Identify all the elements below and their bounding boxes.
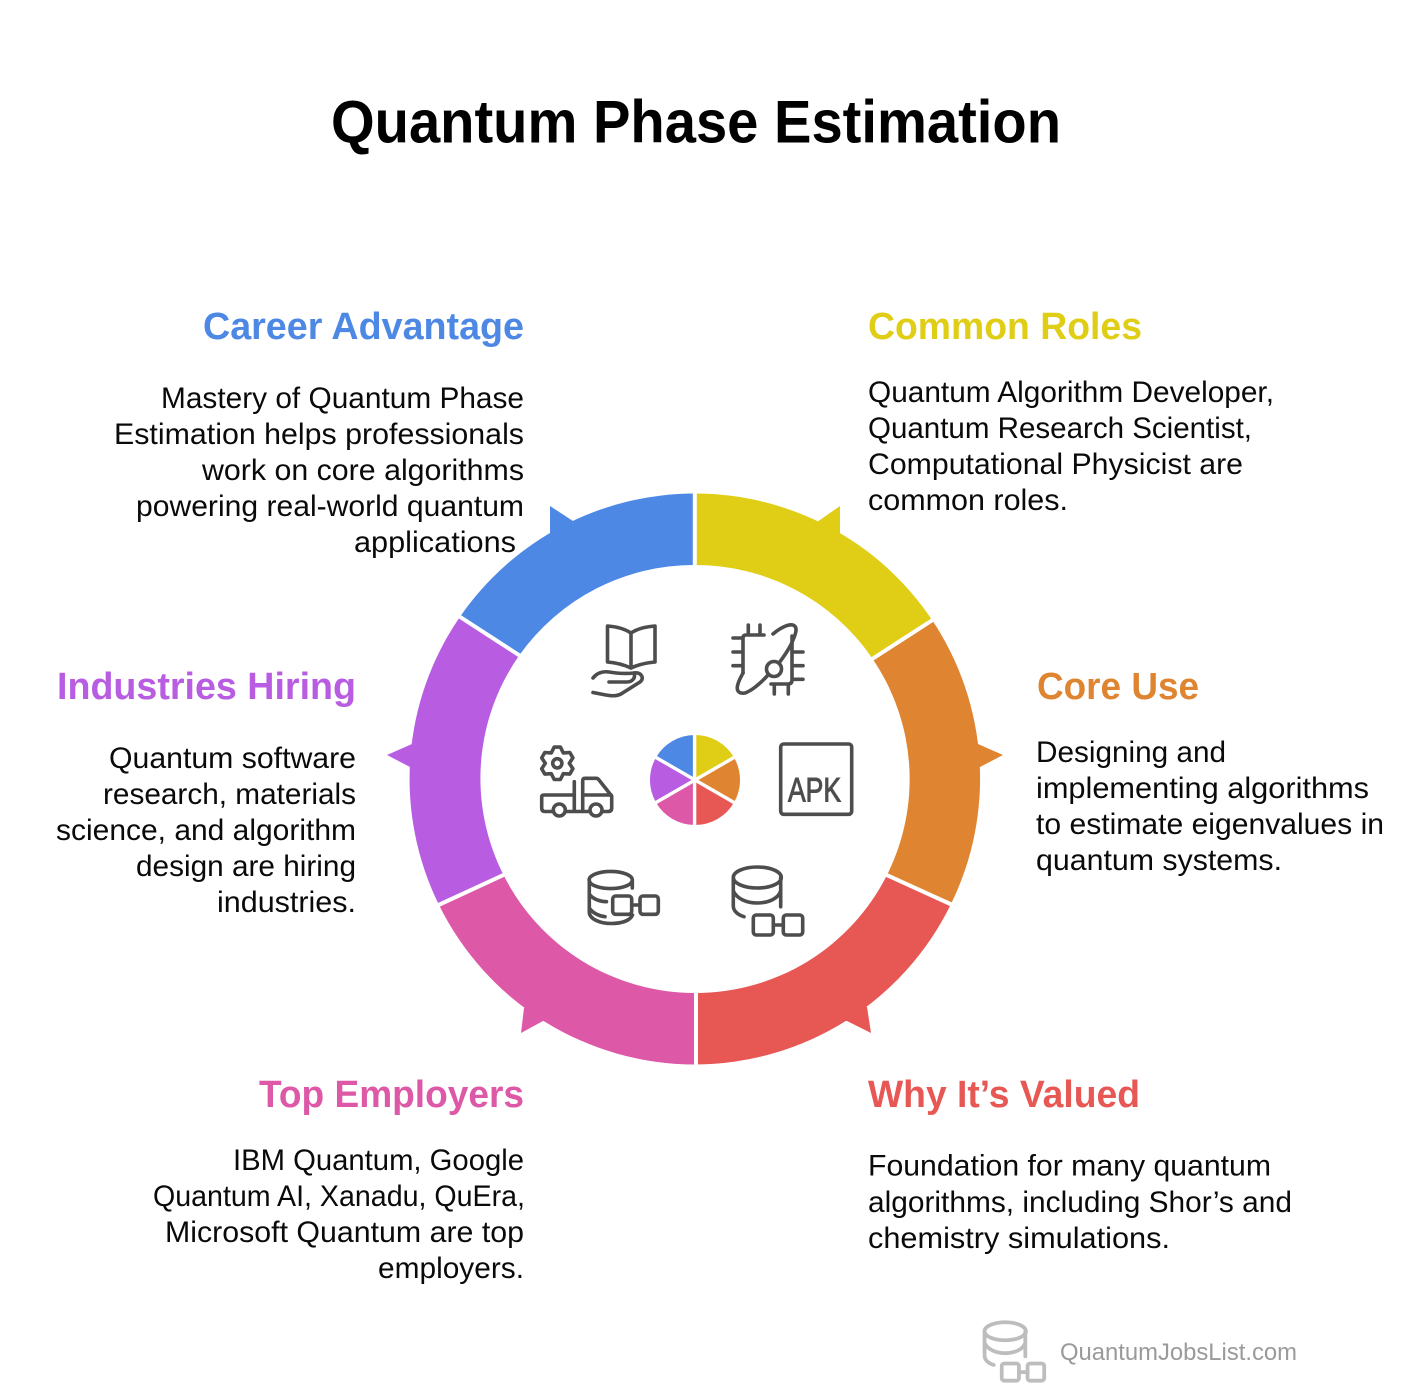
text: industries hiring description: Quantum software (109, 742, 356, 775)
title: Quantum Phase Estimation (331, 88, 1061, 156)
icon: APK file: APK (788, 772, 841, 810)
text: core use description: Designing and (1036, 736, 1226, 769)
text: industries hiring description: science, and algorithm (56, 814, 356, 847)
text: why it's valued description: Foundation for many quantum (868, 1150, 1271, 1182)
text: core use description: quantum systems. (1036, 844, 1282, 877)
text: industries hiring description (56, 742, 356, 919)
panel: top employers (153, 1074, 525, 1285)
panel: why it's valued (868, 1074, 1292, 1255)
icon: APK file (781, 744, 852, 814)
ring segment: top employers (439, 875, 695, 1064)
ring segment: why it's valued (695, 875, 951, 1064)
ring segment: core use (872, 620, 1003, 904)
text: common roles description: Computational Physicist are (868, 448, 1243, 481)
text: core use description: to estimate eigenvalues in (1036, 808, 1384, 841)
segmented ring (387, 485, 1003, 1072)
text: top employers description: employers. (378, 1252, 524, 1285)
ring segment: industries hiring (387, 617, 519, 905)
text: industries hiring description: industries. (217, 886, 356, 919)
text: common roles description: Quantum Research Scientist, (868, 412, 1252, 445)
text: career advantage description: work on core algorithms (201, 454, 524, 487)
text: career advantage description: Estimation helps professionals (114, 418, 524, 451)
panel: common roles (868, 306, 1274, 517)
icon: truck with gear (542, 747, 612, 816)
ring segment: common roles (695, 494, 932, 659)
center pie (650, 730, 740, 830)
text: common roles description (868, 376, 1274, 517)
text: industries hiring description: research, materials (103, 778, 356, 811)
text: top employers description: Microsoft Quantum are top (165, 1216, 524, 1249)
footer text: QuantumJobsList.com (1060, 1339, 1297, 1366)
heading: why it's valued: Why It’s Valued (868, 1074, 1140, 1116)
text: why it's valued description: algorithms, including Shor’s and (868, 1186, 1292, 1219)
panel: career advantage (114, 306, 524, 559)
icon: quantum chip (733, 625, 803, 694)
text: why it's valued description: chemistry simulations. (868, 1222, 1170, 1255)
text: top employers description: IBM Quantum, Google (233, 1144, 524, 1177)
text: top employers description: Quantum AI, Xanadu, QuEra, (153, 1180, 525, 1213)
text: career advantage description: Mastery of Quantum Phase (161, 382, 524, 415)
text: industries hiring description: design are hiring (136, 850, 356, 883)
text: top employers description (153, 1144, 525, 1285)
heading: core use: Core Use (1037, 666, 1199, 708)
heading: industries hiring: Industries Hiring (57, 666, 356, 708)
text: career advantage description: powering real-world quantum (136, 490, 524, 523)
icon: book in hand (593, 626, 655, 696)
heading: common roles: Common Roles (868, 306, 1142, 348)
icon: database with nodes, left (589, 871, 658, 924)
text: career advantage description (114, 382, 524, 559)
panel: core use (1036, 666, 1384, 877)
icon: footer database (985, 1322, 1044, 1381)
panel: industries hiring (56, 666, 356, 919)
footer brand (985, 1322, 1297, 1381)
heading: career advantage: Career Advantage (203, 306, 524, 348)
text: career advantage description: applications (354, 526, 516, 559)
icon: database with nodes, right (733, 867, 803, 935)
text: core use description (1036, 736, 1384, 877)
text: why it's valued description (868, 1150, 1292, 1255)
heading: top employers: Top Employers (259, 1074, 524, 1116)
text: common roles description: common roles. (868, 484, 1068, 517)
text: core use description: implementing algorithms (1036, 772, 1369, 805)
text: common roles description: Quantum Algorithm Developer, (868, 376, 1274, 409)
ring segment: career advantage (460, 493, 695, 655)
